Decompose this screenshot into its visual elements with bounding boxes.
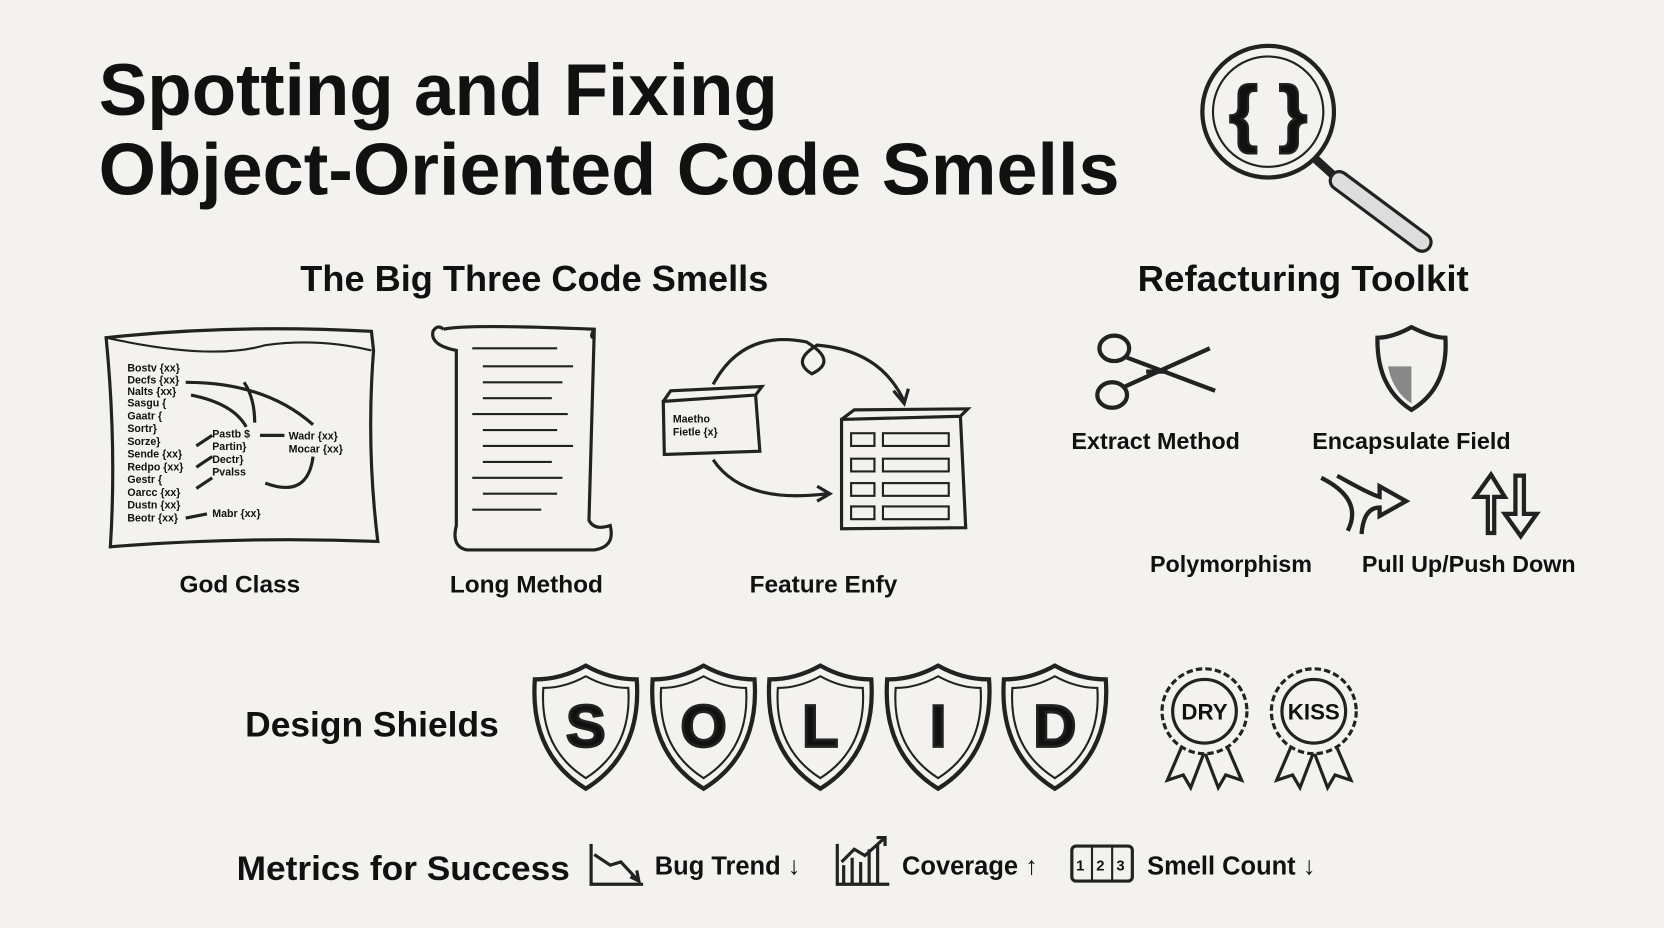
label: long method: Long Method [450,571,603,598]
title [99,49,1120,210]
icon: god class sheet: Nalts {xx} [127,386,176,398]
title: Spotting and Fixing [99,49,778,131]
label: polymorphism: Polymorphism [1150,551,1312,577]
icon: god class sheet: Beotr {xx} [127,512,178,524]
icon: scissors [1097,336,1215,408]
icon: long method scroll [433,327,611,550]
heading: toolkit: Refacturing Toolkit [1138,258,1469,299]
icon: god class sheet [106,329,378,547]
SOLID shields: I [930,692,946,759]
label: encapsulate field: Encapsulate Field [1312,428,1511,454]
icon: god class sheet: Sortr} [127,423,157,435]
label: extract method: Extract Method [1071,428,1240,454]
icon: god class sheet: Bostv {xx} [127,363,180,375]
icon: god class sheet: Decfs {xx} [127,374,179,386]
icon: god class sheet: Mabr {xx} [212,508,261,520]
icon: magnifying glass with braces [1202,46,1422,242]
metric: smell count: Smell Count ↓ [1147,853,1315,881]
heading: metrics: Metrics for Success [237,850,570,888]
icon: feature envy [663,340,968,529]
heading: big three: The Big Three Code Smells [300,258,768,299]
title: Object-Oriented Code Smells [99,128,1120,210]
SOLID shields [534,666,1106,789]
metric: smell count: 1 [1076,858,1084,874]
rosette: KISS: KISS [1288,700,1340,725]
metric: bug trend: Bug Trend ↓ [655,853,800,881]
rosette: DRY: DRY [1181,700,1228,725]
label: god class: God Class [180,571,300,598]
label: feature envy: Feature Enfy [750,571,898,598]
metric: coverage [837,838,1038,884]
metric: smell count: 3 [1116,858,1125,874]
label: pull up push down: Pull Up/Push Down [1362,551,1576,577]
SOLID shields: D [1033,692,1076,759]
rosette: KISS [1271,669,1356,788]
icon: god class sheet: Oarcc {xx} [127,487,180,499]
metric: smell count: 2 [1096,858,1105,874]
heading: design shields: Design Shields [245,706,499,745]
SOLID shields: S [566,692,606,759]
metric: bug trend [591,844,800,884]
SOLID shields: L [802,692,838,759]
icon: god class sheet: Pvalss [212,467,246,479]
icon: god class sheet: Mocar {xx} [289,443,343,455]
icon: god class sheet: Wadr {xx} [289,431,338,443]
icon: god class sheet: Dectr} [212,454,244,466]
icon: god class sheet: Sende {xx} [127,449,182,461]
icon: god class sheet: Gestr { [127,474,162,486]
icon: polymorphism arrow [1321,476,1406,534]
icon: feature envy: Maetho [673,414,710,426]
metric: coverage: Coverage ↑ [902,853,1038,881]
icon: god class sheet: Sorze} [127,436,160,448]
icon: god class sheet: Gaatr { [127,410,162,422]
icon: god class sheet: Pastb $ [212,428,250,440]
icon: god class sheet: Dustn {xx} [127,500,180,512]
icon: god class sheet: Sasgu { [127,398,166,410]
icon: shield [1377,327,1446,410]
metric: smell count [1072,846,1315,881]
icon: magnifying glass with braces: { } [1229,71,1307,154]
icon: feature envy: Fietle {x} [673,426,718,438]
icon: god class sheet: Partin} [212,441,246,453]
icon: up/down arrows [1475,475,1537,536]
icon: god class sheet: Redpo {xx} [127,461,183,473]
SOLID shields: O [680,692,727,759]
rosette: DRY [1162,669,1247,788]
